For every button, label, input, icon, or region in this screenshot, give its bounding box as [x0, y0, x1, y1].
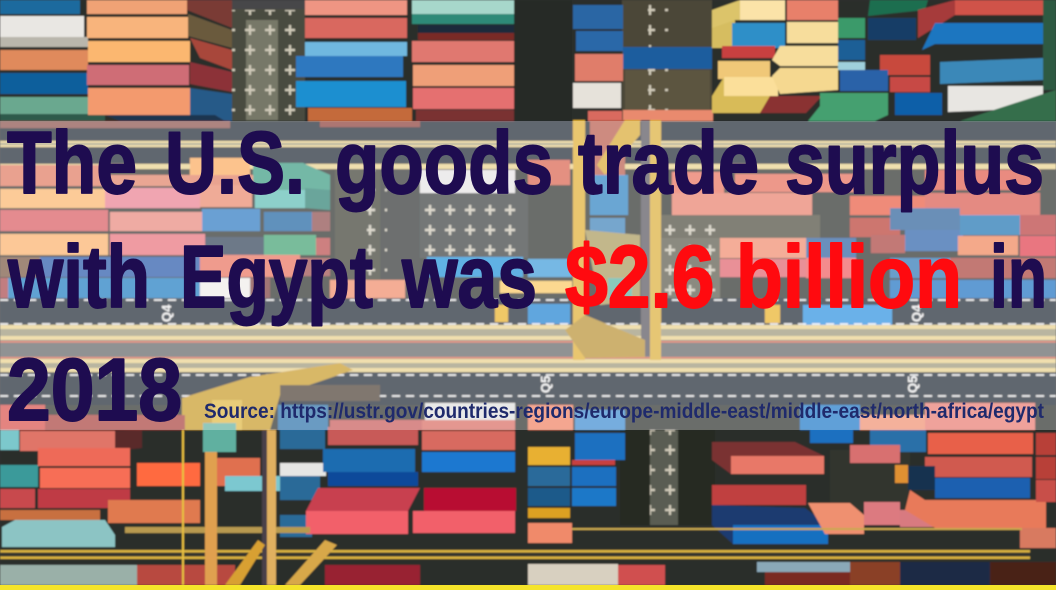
- headline line 2: [7, 227, 1047, 326]
- headline line 1: [7, 113, 1044, 212]
- column 4: [412, 0, 514, 14]
- headline line 2: $2.6 billion: [565, 227, 962, 326]
- upper roadway with cream and yellow lines: [0, 121, 1056, 169]
- cream stack: [712, 0, 785, 35]
- headline line 1: goods: [335, 113, 553, 212]
- painted road bay markers: Q4: [159, 304, 174, 322]
- lower container row: [0, 565, 140, 585]
- column 3: [305, 0, 407, 15]
- crane legs, lower: [182, 423, 337, 585]
- translucent white band behind headline: [0, 121, 1056, 430]
- headline line 3: 2018: [7, 340, 182, 439]
- headline line 2: was: [401, 227, 537, 326]
- painted road bay markers: Q5: [905, 376, 920, 393]
- headline line 1: The: [7, 113, 137, 212]
- headline line 1: U.S.: [165, 113, 305, 212]
- headline line 2: Egypt: [180, 227, 373, 326]
- painted road bay markers: Q4: [909, 304, 924, 322]
- band containers, centre and right: [590, 120, 625, 175]
- painted road bay markers: [159, 304, 924, 393]
- gantry crane, centre: [565, 120, 661, 360]
- painted road bay markers: Q5: [538, 376, 553, 393]
- lower road markings: [0, 550, 1030, 559]
- column 2: [87, 0, 187, 14]
- yellow bottom strip: [0, 585, 1056, 590]
- column 5: [573, 5, 623, 29]
- gantry crane, lower left: [182, 363, 380, 430]
- top containers, column 1: [0, 0, 80, 14]
- headline line 2: with: [7, 227, 150, 326]
- lower photo: centre and right stacks: [528, 447, 570, 465]
- lower photo: left stacks: [0, 430, 19, 450]
- headline line 1: trade: [578, 113, 759, 212]
- band lower containers: [0, 405, 45, 430]
- lower roadways: [0, 298, 1056, 325]
- right stacks: [838, 18, 865, 38]
- gravel yards: [232, 0, 305, 121]
- band containers, left: [0, 165, 100, 186]
